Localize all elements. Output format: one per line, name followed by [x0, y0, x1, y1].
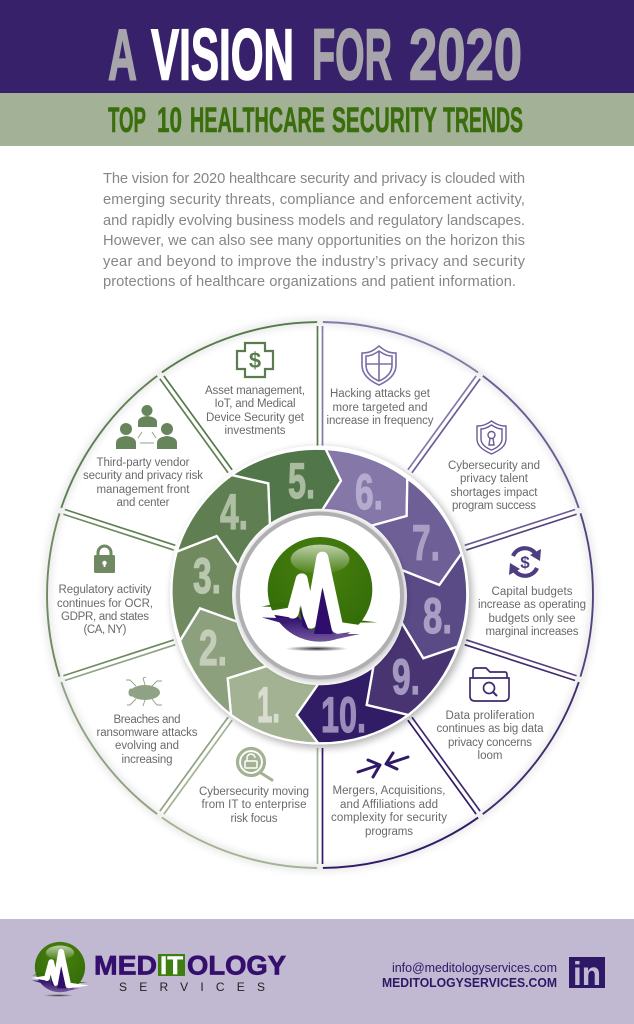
item 9: continues as big data: [436, 723, 544, 735]
item 4: and center: [116, 497, 170, 509]
item 10: and Affiliations add: [340, 799, 438, 811]
item 7: shortages impact: [450, 487, 538, 499]
item 1: Cybersecurity moving: [199, 786, 309, 798]
numbered wheel: 7.: [412, 515, 440, 571]
icon: magnifier with lock: [238, 748, 272, 780]
item 7: privacy talent: [460, 473, 529, 485]
icon: shield with cross: [362, 346, 396, 385]
numbered wheel: 9.: [392, 649, 420, 705]
item 6: more targeted and: [332, 402, 428, 414]
intro paragraph: year and beyond to improve the industry’s privacy and security: [103, 254, 526, 270]
item 3: (CA, NY): [84, 624, 127, 636]
icon: converging arrows: [358, 753, 408, 777]
item 2: ransomware attacks: [96, 727, 198, 739]
item 4: security and privacy risk: [83, 470, 203, 482]
contact text: MEDITOLOGYSERVICES.COM: [382, 975, 557, 990]
item 8: increase as operating: [478, 599, 586, 611]
subtitle: SECURITY: [332, 101, 437, 140]
subtitle: [108, 101, 523, 140]
icon: bug: [126, 677, 162, 706]
subtitle: TOP: [108, 101, 146, 140]
item 3: GDPR, and states: [61, 611, 149, 623]
item 7: Cybersecurity and: [448, 460, 540, 472]
item 10: [331, 753, 447, 838]
title: A: [108, 16, 137, 96]
numbered wheel: 5.: [288, 453, 315, 509]
icon: padlock: [94, 546, 115, 573]
footer logo: IT: [160, 952, 183, 980]
item 6: Hacking attacks get: [330, 388, 431, 400]
subtitle: 10: [157, 101, 182, 140]
footer logo: OLOGY: [187, 950, 286, 980]
numbered wheel: 1.: [257, 677, 280, 733]
item 8: [478, 548, 586, 638]
item 5: Device Security get: [206, 412, 305, 424]
numbered wheel: 8.: [423, 588, 452, 644]
contact text: info@meditologyservices.com: [392, 961, 557, 975]
center logo: [237, 513, 405, 681]
item 8: budgets only see: [488, 613, 576, 625]
item 4: [83, 405, 203, 509]
item 5: IoT, and Medical: [214, 398, 296, 410]
title: [108, 16, 522, 96]
contact text: [382, 961, 557, 990]
title: VISION: [151, 16, 294, 96]
item 7: [448, 421, 540, 512]
item 3: Regulatory activity: [58, 584, 152, 596]
item 2: evolving and: [115, 740, 179, 752]
intro paragraph: and rapidly evolving business models and regulatory landscapes.: [103, 213, 525, 229]
intro paragraph: [103, 171, 526, 290]
item 3: [57, 546, 153, 636]
icon: folder with magnifier: [470, 668, 509, 701]
title banner: [0, 0, 634, 96]
icon: medical cross dollar: $: [249, 348, 261, 373]
icon: three people: [116, 405, 177, 449]
item 3: continues for OCR,: [57, 598, 153, 610]
item 5: [205, 343, 305, 437]
footer logo: SERVICES: [119, 980, 265, 994]
item 9: privacy concerns: [448, 737, 532, 749]
item 9: Data proliferation: [446, 710, 534, 722]
item 1: from IT to enterprise: [202, 799, 306, 811]
numbered wheel: [170, 446, 472, 748]
item 10: Mergers, Acquisitions,: [332, 785, 446, 797]
intro paragraph: emerging security threats, compliance and enforcement activity,: [103, 192, 525, 208]
intro paragraph: The vision for 2020 healthcare security and privacy is clouded with: [103, 171, 525, 187]
item 2: [96, 677, 198, 766]
title: FOR: [312, 16, 392, 96]
icon: linkedin: in: [573, 955, 601, 992]
item 2: increasing: [122, 754, 172, 766]
icon: shield with keyhole: [477, 421, 506, 454]
item 1: risk focus: [230, 813, 278, 825]
item 4: management front: [96, 484, 190, 496]
item 8: Capital budgets: [492, 586, 573, 598]
item 9: loom: [478, 750, 502, 762]
item 9: [436, 668, 544, 762]
subtitle: HEALTHCARE: [190, 101, 325, 140]
intro paragraph: However, we can also see many opportunities on the horizon this: [103, 233, 525, 249]
item 4: Third-party vendor: [96, 457, 190, 469]
item 6: [326, 346, 434, 427]
footer: [0, 919, 634, 1024]
intro paragraph: protections of healthcare organizations and patient information.: [103, 274, 516, 290]
item 10: complexity for security: [331, 812, 447, 824]
numbered wheel: 3.: [193, 548, 221, 604]
item 6: increase in frequency: [326, 415, 434, 427]
numbered wheel: 4.: [220, 484, 248, 540]
icon: dollar cycle: $: [520, 553, 530, 572]
item 8: marginal increases: [486, 626, 579, 638]
item 10: programs: [365, 826, 413, 838]
item 7: program success: [452, 500, 536, 512]
item 5: investments: [224, 425, 286, 437]
outer ring with dividers: [12, 281, 628, 909]
item 1: [199, 748, 309, 825]
footer logo: [31, 942, 286, 997]
numbered wheel: 2.: [199, 620, 227, 676]
item 5: Asset management,: [205, 385, 305, 397]
footer logo: MED: [94, 950, 157, 980]
item 2: Breaches and: [114, 714, 180, 726]
numbered wheel: 6.: [355, 464, 383, 520]
title: 2020: [409, 16, 522, 96]
subtitle band: [0, 93, 634, 146]
numbered wheel: 10.: [321, 687, 366, 743]
subtitle: TRENDS: [443, 101, 523, 140]
